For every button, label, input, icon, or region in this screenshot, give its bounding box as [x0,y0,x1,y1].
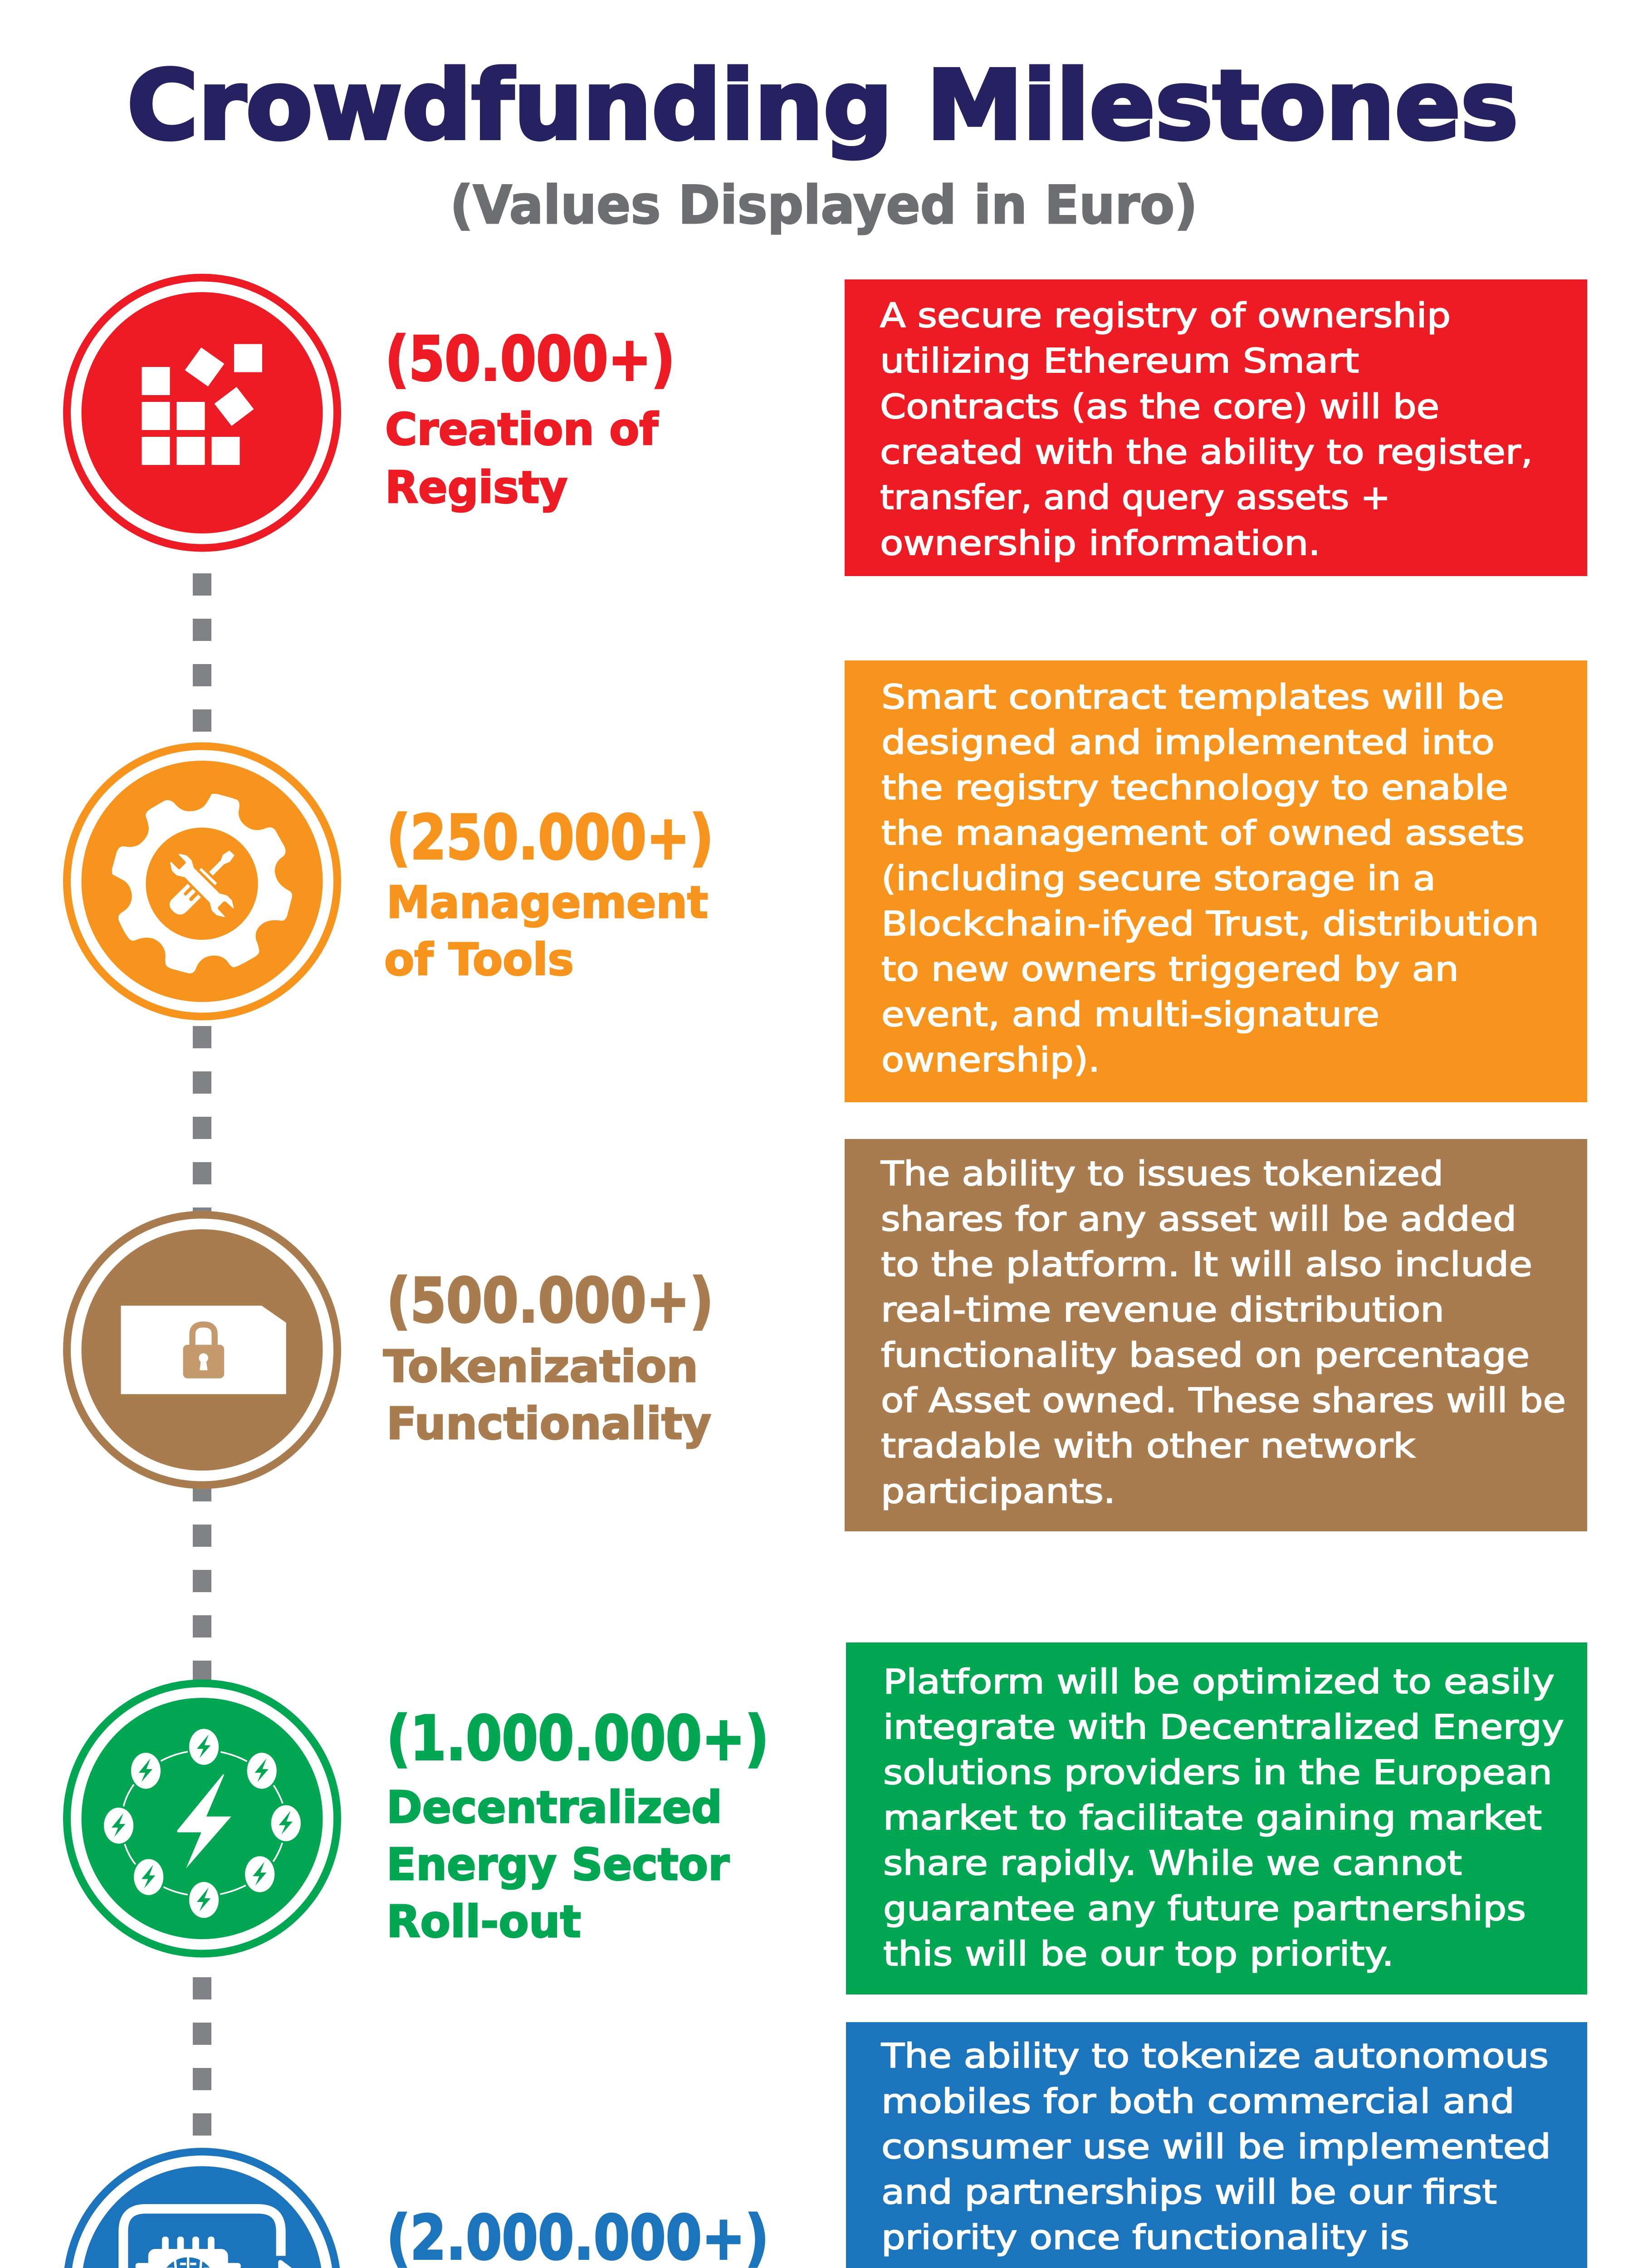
description box: this will be our top priority. [883,1935,1394,1974]
description box: Smart contract templates will be [881,678,1504,717]
milestone name: Roll-out [386,1896,581,1947]
description box: participants. [881,1472,1115,1511]
panel: milestone 4 decentralized energy [67,1642,1587,1994]
description box: share rapidly. While we cannot [883,1844,1462,1883]
description box: market to facilitate gaining market [883,1799,1542,1838]
milestone name: Registy [385,462,567,513]
panel: milestone 1 creation of registry [67,278,1587,576]
panel: milestone 5 AI sector [67,2022,1587,2268]
description box: the registry technology to enable [881,768,1508,807]
description box: priority once functionality is [881,2218,1409,2257]
milestone name: Tokenization [383,1341,698,1392]
description box [845,1139,1587,1531]
milestone name: Energy Sector [386,1839,729,1890]
description box: consumer use will be implemented [881,2127,1551,2166]
description box: tradable with other network [881,1427,1415,1466]
icon: locked token card [67,1215,337,1485]
title: Crowdfunding Milestones [127,50,1518,161]
description box: ownership). [881,1041,1100,1080]
amount: (1.000.000+) [386,1703,769,1774]
description box: real-time revenue distribution [881,1290,1444,1330]
milestone name [383,1341,711,1449]
description box: (including secure storage in a [881,859,1436,898]
description box [845,279,1587,576]
description box: Platform will be optimized to easily [883,1662,1555,1701]
description box: solutions providers in the European [883,1753,1552,1792]
milestone name [386,1782,729,1947]
milestone name: Functionality [386,1398,711,1449]
description box: A secure registry of ownership [880,296,1451,335]
description box: The ability to issues tokenized [880,1154,1443,1193]
icon: AI chip with arrow [67,2152,337,2268]
description box: of Asset owned. These shares will be [881,1381,1566,1420]
description box: mobiles for both commercial and [881,2082,1515,2121]
description box: guarantee any future partnerships [883,1889,1526,1928]
description box: Contracts (as the core) will be [880,387,1439,426]
icon: energy network [67,1683,337,1954]
description box: integrate with Decentralized Energy [883,1708,1564,1747]
description box [846,2022,1587,2268]
amount: (250.000+) [386,802,714,873]
icon: gear with tools [67,746,337,1017]
panel: milestone 3 tokenization functionality [67,1139,1587,1531]
milestone name [384,877,708,985]
subtitle: (Values Displayed in Euro) [450,175,1198,236]
icon: registry blocks [67,278,337,548]
milestone name: Creation of [385,404,659,455]
description box: to new owners triggered by an [881,950,1459,989]
milestone name [385,404,659,513]
description box [846,1642,1587,1994]
description box: The ability to tokenize autonomous [881,2037,1549,2076]
description box: ownership information. [880,524,1320,563]
description box [845,660,1587,1102]
milestone name: Decentralized [386,1782,722,1833]
description box: and partnerships will be our first [881,2173,1497,2212]
description box: functionality based on percentage [881,1336,1530,1375]
milestone name: of Tools [384,934,574,985]
description box: to the platform. It will also include [881,1245,1532,1284]
milestone name: Management [386,877,708,928]
description box: transfer, and query assets + [880,478,1390,517]
panel: milestone 2 management of tools [67,660,1587,1102]
description box: designed and implemented into [881,723,1495,762]
description box: Blockchain-ifyed Trust, distribution [881,904,1539,943]
dashed timeline connector [193,573,211,2268]
description box: utilizing Ethereum Smart [880,342,1359,381]
description box: the management of owned assets [881,814,1525,853]
description box: created with the ability to register, [880,433,1533,472]
description box: event, and multi-signature [881,995,1379,1034]
description box: shares for any asset will be added [881,1200,1516,1239]
amount: (500.000+) [386,1265,714,1336]
amount: (50.000+) [385,323,675,395]
